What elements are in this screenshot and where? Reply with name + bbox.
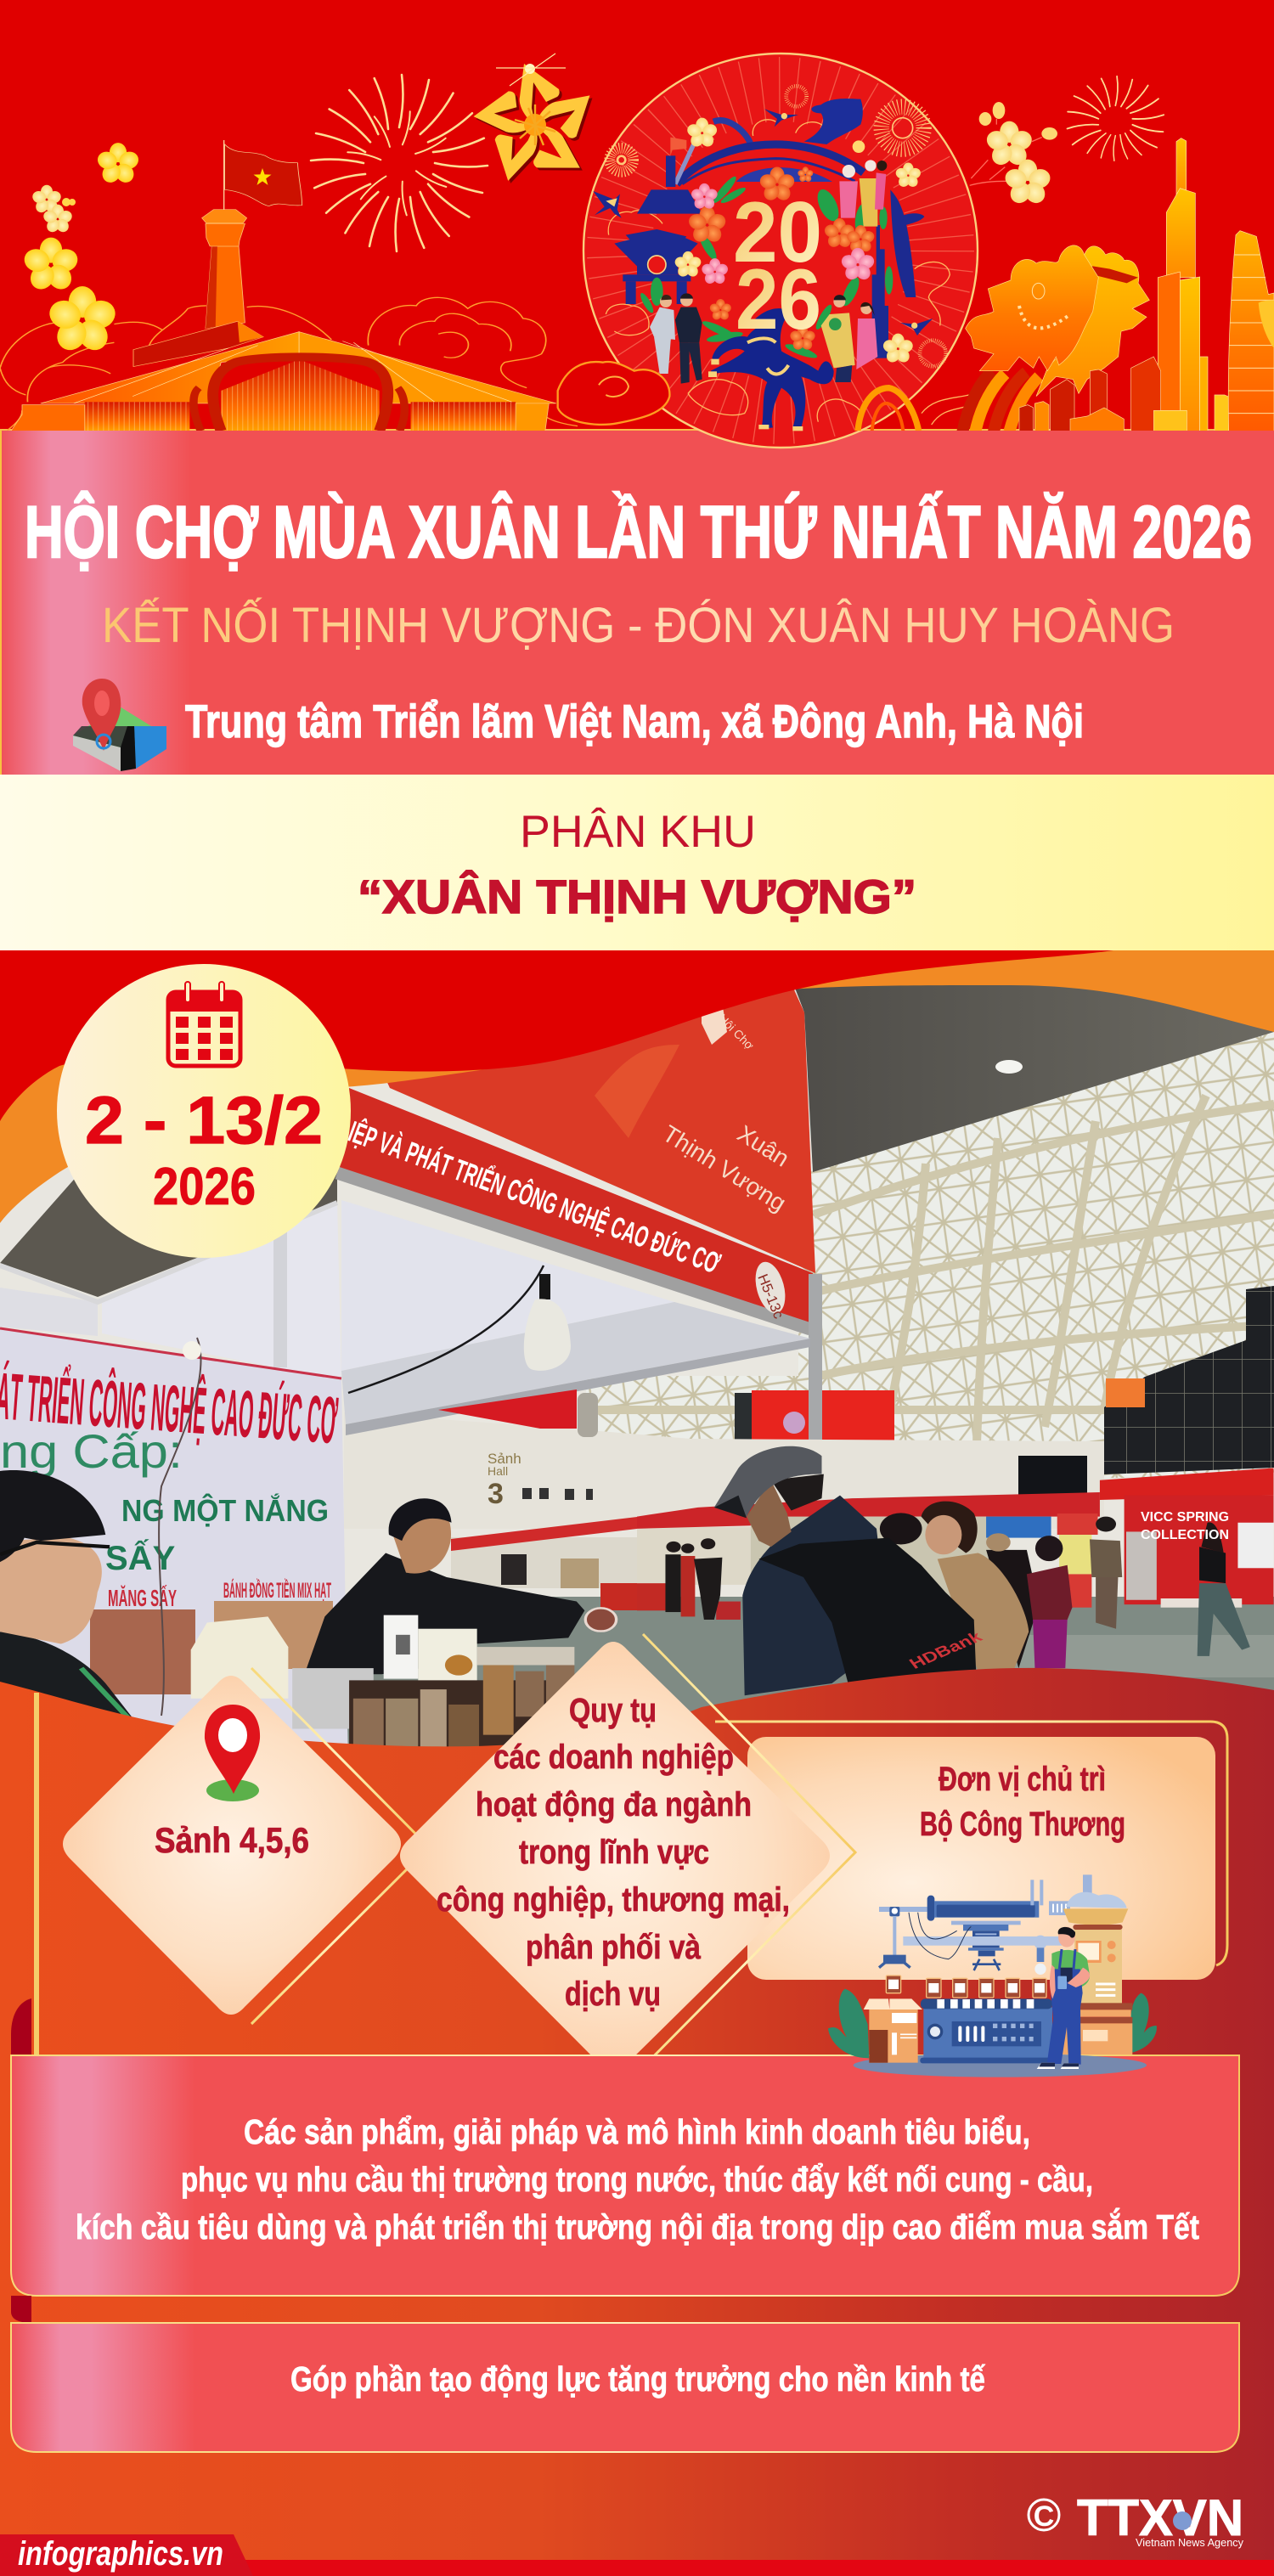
organiser text bbox=[920, 1761, 1125, 1843]
logo: TTXVN: TTXVN bbox=[1077, 2489, 1243, 2546]
floor bbox=[344, 1597, 1274, 1750]
participants text: hoạt động đa ngành bbox=[476, 1786, 752, 1823]
lower gradient background bbox=[0, 1668, 1274, 2576]
scaffolding bbox=[1104, 1286, 1274, 1474]
Landmark tower bbox=[1176, 138, 1187, 198]
small firework bbox=[1067, 76, 1164, 161]
dragon and bridge bbox=[713, 121, 750, 143]
woman in maroon coat bbox=[1035, 1536, 1063, 1561]
icon: location pin bbox=[205, 1705, 260, 1801]
stallholder bbox=[304, 1553, 584, 1674]
top wave: red bbox=[0, 950, 1113, 1121]
birds bbox=[593, 191, 622, 218]
bottles bbox=[886, 1976, 1046, 1998]
left product banner bbox=[0, 1328, 348, 1767]
lion legs bbox=[962, 371, 1039, 431]
foreground cloud near emblem bbox=[558, 362, 974, 431]
left product banner: MĂNG SẤY bbox=[108, 1585, 177, 1611]
photo of the exhibition booth: COLLECTION bbox=[1141, 1528, 1229, 1542]
year 2026 bbox=[733, 185, 822, 347]
far hall booths and visitors bbox=[637, 1446, 1274, 1695]
conveyor bbox=[920, 1998, 1056, 2063]
lion mane bbox=[1036, 246, 1149, 397]
face and cap bbox=[747, 1480, 792, 1547]
business people bbox=[650, 293, 702, 384]
lion head bbox=[966, 245, 1098, 371]
large red screen bbox=[752, 1390, 894, 1444]
footer tab with site name: infographics.vn bbox=[18, 2535, 223, 2573]
citadel bbox=[666, 155, 675, 187]
cream band: zone name bbox=[0, 775, 1274, 950]
closing message text: Góp phần tạo động lực tăng trưởng cho nền kinh tế bbox=[290, 2359, 985, 2398]
photo of the exhibition booth: H5-13c bbox=[754, 1271, 787, 1322]
blossom branch bbox=[970, 119, 1042, 185]
flowers bbox=[674, 118, 922, 365]
skyscrapers bbox=[890, 189, 916, 297]
icon: calendar bbox=[168, 982, 240, 1066]
red title panel bbox=[0, 429, 1274, 775]
info box: organiser bbox=[715, 1722, 1227, 1980]
lower fascia with booth name bbox=[337, 1088, 813, 1329]
top wave: orange band bbox=[0, 950, 1274, 1223]
zone label: PHÂN KHU bbox=[520, 807, 756, 857]
photo of the exhibition booth: Sảnh bbox=[488, 1451, 521, 1467]
blossoms bbox=[987, 121, 1050, 204]
cloud outlines bbox=[0, 297, 578, 431]
left product banner: SẤY bbox=[105, 1538, 176, 1577]
photo of the exhibition booth: VICC SPRING bbox=[1141, 1510, 1229, 1525]
post bbox=[809, 1338, 822, 1440]
family bbox=[839, 160, 887, 227]
dark soffit bbox=[795, 985, 1274, 1172]
footer strip bbox=[0, 2560, 1274, 2576]
left product banner: NG MỘT NẮNG bbox=[121, 1492, 329, 1528]
dark-coated visitor bbox=[986, 1550, 1039, 1668]
panel: closing message bbox=[11, 2323, 1239, 2452]
people and products in the foreground bbox=[0, 1470, 617, 1759]
header background bbox=[0, 0, 1274, 442]
visitors far right bbox=[1096, 1517, 1116, 1531]
organiser text: Đơn vị chủ trì bbox=[939, 1761, 1106, 1798]
participants text: phân phối và bbox=[526, 1929, 702, 1966]
truss roof bbox=[586, 1019, 1274, 1478]
flag bbox=[223, 140, 224, 210]
photo of the exhibition booth: Hội Chợ bbox=[716, 1012, 757, 1052]
horse bbox=[711, 308, 834, 429]
date range: 2 - 13/2 bbox=[85, 1082, 323, 1158]
hall wall bbox=[586, 1431, 1104, 1478]
flag tower bbox=[133, 210, 263, 367]
upper press bbox=[879, 1874, 1092, 1975]
participants text: các doanh nghiệp bbox=[493, 1739, 734, 1776]
subtitle: KẾT NỐI THỊNH VƯỢNG - ĐÓN XUÂN HUY HOÀNG bbox=[102, 598, 1175, 653]
participants text bbox=[437, 1692, 790, 2013]
left product banner: ng Cấp: bbox=[0, 1424, 183, 1478]
exhibition hall roof bbox=[11, 332, 556, 431]
red screen behind booth bbox=[438, 1389, 577, 1429]
year: 2026 bbox=[153, 1158, 256, 1216]
panel fold 2 bbox=[11, 2296, 31, 2323]
lower buildings bbox=[1019, 357, 1240, 431]
year 2026: 20 bbox=[733, 185, 822, 280]
cloud outlines bbox=[606, 120, 950, 431]
products on counter bbox=[191, 1616, 288, 1699]
circular 2026 emblem bbox=[583, 54, 978, 448]
photo of the exhibition booth: BÁNH ĐỒNG TIỀN MIX HẠT bbox=[223, 1577, 331, 1603]
photo of the exhibition booth: ÁT TRIỂN CÔNG NGHỆ CAO ĐỨC CƠ bbox=[0, 1358, 340, 1457]
logo: TTXVN: Vietnam News Agency bbox=[1136, 2536, 1243, 2549]
white booth ceiling and walls bbox=[0, 1087, 337, 1297]
leaves bbox=[639, 174, 893, 361]
distant booths on the left bbox=[451, 1517, 651, 1610]
key message text bbox=[76, 2112, 1199, 2246]
header illustration: right side skyline and lion bbox=[962, 76, 1274, 431]
fascia lettering: Xuân bbox=[733, 1120, 794, 1172]
worker bbox=[1037, 1927, 1090, 2069]
zone name: “XUÂN THỊNH VƯỢNG” bbox=[358, 870, 916, 923]
header illustration: Hanoi landmarks bbox=[0, 140, 578, 431]
sun bursts bbox=[610, 86, 946, 366]
participants text: dịch vụ bbox=[565, 1976, 661, 2013]
year 2026: 26 bbox=[736, 252, 821, 347]
photo of the exhibition booth bbox=[0, 950, 1274, 1767]
golden five-petal star emblem bbox=[472, 54, 603, 191]
apricot blossoms left bbox=[21, 143, 141, 356]
organiser text: Bộ Công Thương bbox=[920, 1806, 1125, 1843]
Bitexco tower bbox=[1228, 231, 1274, 431]
key message text: Các sản phẩm, giải pháp và mô hình kinh doanh tiêu biểu, bbox=[244, 2112, 1030, 2151]
participants text: trong lĩnh vực bbox=[519, 1834, 709, 1871]
boxes bbox=[864, 1998, 922, 2063]
post upper bbox=[809, 1274, 822, 1338]
temple bbox=[614, 229, 698, 304]
couple in ao dai bbox=[821, 295, 877, 382]
firework centre bbox=[311, 75, 488, 251]
left red fascia bbox=[374, 960, 815, 1273]
panel fold 1 bbox=[11, 1998, 31, 2057]
man's jacket bbox=[742, 1496, 945, 1695]
photo of the exhibition booth: 3 bbox=[488, 1478, 504, 1510]
gold rule left bbox=[34, 1693, 39, 2058]
man in foreground left bbox=[0, 1632, 146, 1759]
diamond: participants bbox=[400, 1634, 855, 2077]
participants text: công nghiệp, thương mại, bbox=[437, 1881, 790, 1919]
star on flag bbox=[253, 168, 272, 185]
plants bbox=[828, 1989, 869, 2058]
photo of the exhibition booth: Thịnh Vượng bbox=[658, 1120, 791, 1216]
hanging bulb bbox=[348, 1265, 571, 1393]
woman in beige jacket bbox=[922, 1502, 978, 1553]
date badge bbox=[57, 964, 351, 1258]
participants text: Quy tụ bbox=[569, 1692, 657, 1729]
backpack bbox=[758, 1538, 976, 1683]
logo: TTXVN: C bbox=[1034, 2500, 1054, 2533]
panel: key message bbox=[11, 2055, 1239, 2296]
far hall booths and visitors: HDBank bbox=[906, 1628, 986, 1672]
illustration: factory production line bbox=[828, 1874, 1157, 2077]
diamond: halls bbox=[63, 1668, 429, 2024]
hopper machine bbox=[1059, 1892, 1132, 2055]
photo of the exhibition booth: IỆP VÀ PHÁT TRIỂN CÔNG NGHỆ CAO ĐỨC CƠ bbox=[344, 1114, 724, 1281]
photo of the exhibition booth: Hall bbox=[488, 1464, 508, 1478]
icon: map pin on tile bbox=[73, 679, 166, 771]
VICC booth bbox=[1100, 1468, 1274, 1500]
halls text: Sảnh 4,5,6 bbox=[155, 1820, 309, 1860]
